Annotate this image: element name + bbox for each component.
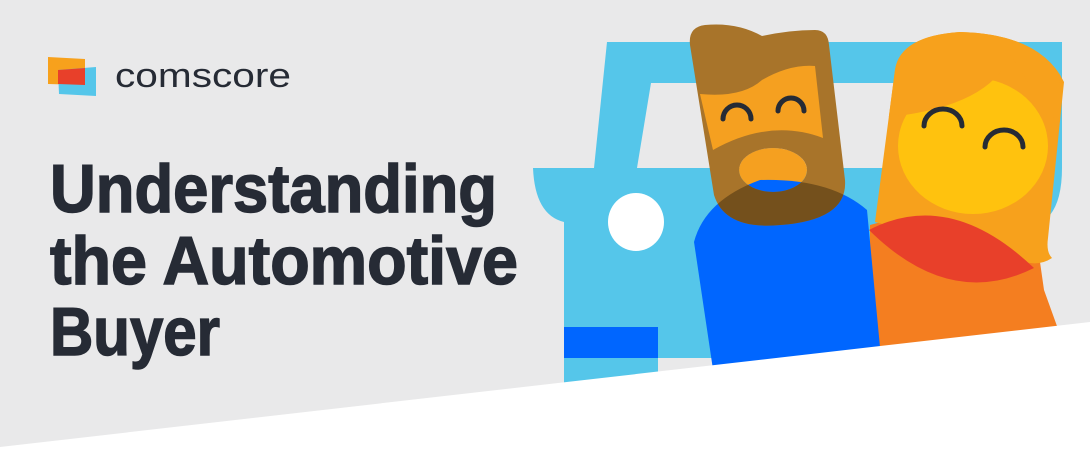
- title: Buyer: [50, 294, 220, 370]
- logo: comscore: [48, 57, 291, 96]
- illustration: woman: [869, 32, 1064, 346]
- title: Understanding: [50, 151, 497, 227]
- white diagonal footer: [0, 322, 1090, 451]
- logo: comscore: comscore: [115, 57, 291, 95]
- title: the Automotive: [50, 223, 518, 299]
- illustration: car: [533, 42, 1062, 430]
- icon: headlight: [608, 193, 664, 251]
- bumper: [564, 327, 658, 358]
- illustration: man: [690, 24, 880, 366]
- title: [50, 151, 518, 370]
